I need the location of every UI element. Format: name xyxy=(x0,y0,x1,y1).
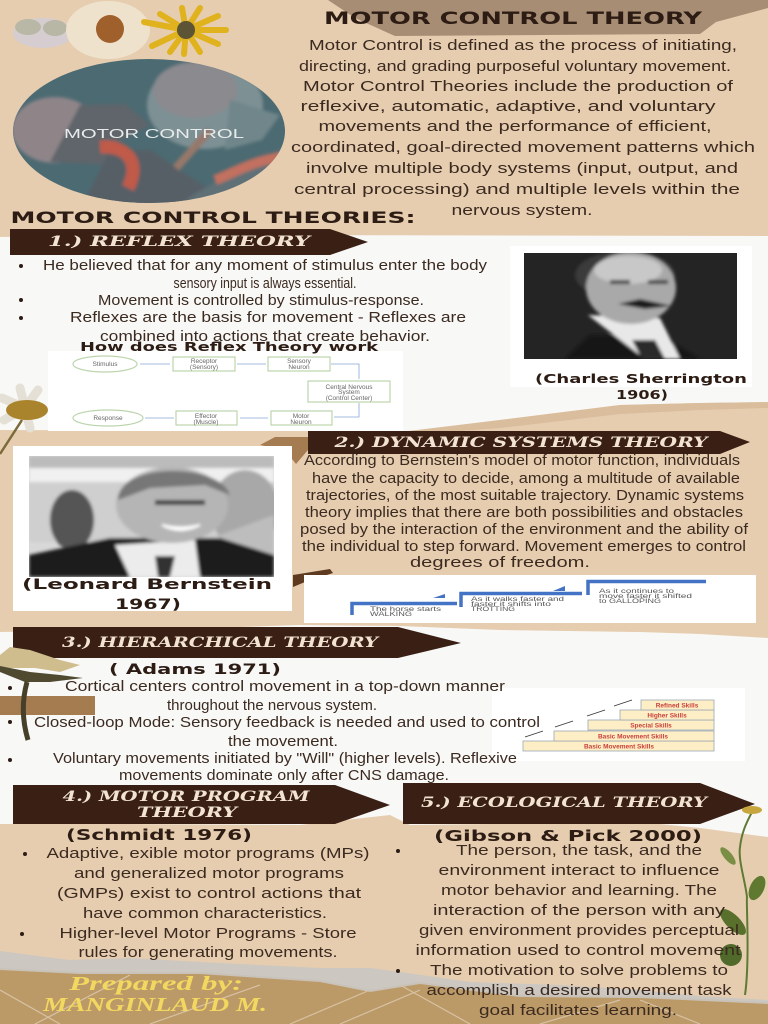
ecological theory text: motor behavior and learning. The xyxy=(441,882,717,899)
dynamic systems text: the individual to step forward. Movement emerges to control xyxy=(302,538,746,555)
stepped gait diagram: WALKING xyxy=(370,611,412,618)
photo card: Leonard Bernstein xyxy=(13,446,292,613)
banner: motor program theory: THEORY xyxy=(137,805,240,821)
prepared by credit: MANGINLAUD M. xyxy=(42,994,267,1016)
cardboard footer xyxy=(0,951,768,1024)
skills staircase diagram: Basic Movement Skills xyxy=(598,734,668,740)
banner: motor program theory: 4.) MOTOR PROGRAM xyxy=(62,789,310,805)
reflex theory bullets xyxy=(19,257,488,345)
reflex flow diagram: Stimulus xyxy=(93,361,118,368)
stepped gait diagram: As it walks faster and xyxy=(471,596,565,603)
motor program text: have common characteristics. xyxy=(83,905,327,922)
motor program text: Higher-level Motor Programs - Store xyxy=(60,925,356,942)
stepped gait diagram: move faster it shifted xyxy=(599,593,693,600)
torn white paper band upper xyxy=(0,235,768,432)
skills staircase diagram: Basic Movement Skills xyxy=(584,744,654,750)
torn tan paper strip xyxy=(400,402,768,434)
motor program text: rules for generating movements. xyxy=(78,944,338,961)
intro text block: central processing) and multiple levels within the xyxy=(294,181,740,198)
photo card: Leonard Bernstein: 1967) xyxy=(115,597,181,613)
dynamic systems text: theory implies that there are both possibilities and obstacles xyxy=(305,504,743,521)
banner: reflex theory: 1.) REFLEX THEORY xyxy=(48,234,313,250)
ecological theory text: given environment provides perceptual xyxy=(419,922,739,939)
intro text block: coordinated, goal-directed movement patterns which xyxy=(291,139,755,156)
photo card: Leonard Bernstein: (Leonard Bernstein xyxy=(22,577,272,593)
stepped gait diagram: The horse starts xyxy=(370,606,442,613)
reflex theory bullets: Reflexes are the basis for movement - Reflexes are xyxy=(70,309,466,326)
reflex flow diagram: System xyxy=(338,389,360,396)
hierarchical theory bullets: Voluntary movements initiated by "Will" (higher levels). Reflexive xyxy=(53,750,517,767)
reflex flow diagram: Motor xyxy=(293,413,310,420)
skills staircase diagram xyxy=(492,688,745,761)
ecological theory text: accomplish a desired movement task xyxy=(426,982,732,999)
intro text block: movements and the performance of efficient, xyxy=(318,118,712,135)
skills staircase diagram: Higher Skills xyxy=(647,712,687,720)
reflex flow diagram: Neuron xyxy=(288,364,310,371)
motor program text: Adaptive, exible motor programs (MPs) xyxy=(46,845,370,862)
hierarchical theory bullets xyxy=(8,678,540,784)
reflex flow diagram: Effector xyxy=(195,413,218,420)
banner: ecological theory: 5.) ECOLOGICAL THEORY xyxy=(421,795,710,811)
intro text block: Motor Control is defined as the process of initiating, xyxy=(309,37,737,54)
reflex theory bullets: combined into actions that create behavior. xyxy=(100,328,430,345)
dynamic systems text: degrees of freedom. xyxy=(410,554,590,571)
heading: motor control theories: MOTOR CONTROL THEORIES: xyxy=(10,208,416,227)
banner: hierarchical theory: 3.) HIERARCHICAL THEORY xyxy=(62,635,381,651)
stepped gait diagram: to GALLOPING xyxy=(599,598,661,605)
image: motor control oval xyxy=(12,59,285,210)
photo card: Charles Sherrington: (Charles Sherrington xyxy=(535,372,747,386)
icon: climbing plant xyxy=(716,806,768,995)
skills staircase diagram: Refined Skills xyxy=(656,702,699,710)
author: Gibson and Pick 2000: (Gibson & Pick 2000) xyxy=(434,827,702,845)
dynamic systems text: trajectories, of the most suitable trajectory. Dynamic systems xyxy=(306,487,744,504)
prepared by credit xyxy=(42,973,267,1016)
reflex flow diagram: (Sensory) xyxy=(190,364,218,371)
title: MOTOR CONTROL THEORY xyxy=(324,9,703,29)
intro text block: involve multiple body systems (input, output, and xyxy=(306,160,738,177)
banner: dynamic systems theory: 2.) DYNAMIC SYSTEMS THEORY xyxy=(333,435,710,451)
dynamic systems text: According to Bernstein's model of motor function, individuals xyxy=(304,452,740,469)
icon: pressed flowers xyxy=(13,1,226,59)
reflex theory bullets: sensory input is always essential. xyxy=(174,275,356,292)
dynamic systems text xyxy=(300,452,749,571)
author: Adams 1971: ( Adams 1971) xyxy=(109,662,281,678)
hierarchical theory bullets: Cortical centers control movement in a top-down manner xyxy=(65,678,505,695)
icon: daisy xyxy=(0,388,48,454)
motor program text xyxy=(20,845,370,961)
photo card: Charles Sherrington: 1906) xyxy=(616,388,668,402)
stepped gait diagram xyxy=(304,575,756,623)
subheading: how does reflex theory work: How does Reflex Theory work xyxy=(80,339,379,354)
reflex flow diagram: Receptor xyxy=(191,358,218,365)
reflex flow diagram xyxy=(48,351,403,431)
skills staircase diagram: Special Skills xyxy=(630,722,672,730)
hierarchical theory bullets: movements dominate only after CNS damage. xyxy=(119,767,449,784)
reflex theory bullets: He believed that for any moment of stimulus enter the body xyxy=(43,257,488,274)
ecological theory text: goal facilitates learning. xyxy=(479,1002,677,1019)
icon: rust ribbon xyxy=(293,569,333,587)
motor program text: and generalized motor programs xyxy=(74,865,344,882)
intro text block: reflexive, automatic, adaptive, and voluntary xyxy=(300,98,716,115)
ecological theory text: information used to control movement xyxy=(416,942,742,959)
torn brown paper behind title xyxy=(328,0,768,36)
ecological theory text: interaction of the person with any xyxy=(433,902,726,919)
dynamic systems text: posed by the interaction of the environment and the ability of xyxy=(300,521,749,538)
hierarchical theory bullets: Closed-loop Mode: Sensory feedback is needed and used to control xyxy=(34,714,540,731)
reflex flow diagram: (Muscle) xyxy=(194,419,218,426)
photo card: Charles Sherrington xyxy=(510,246,752,402)
banner: reflex theory xyxy=(10,229,368,255)
ecological theory text: The motivation to solve problems to xyxy=(430,962,728,979)
prepared by credit: Prepared by: xyxy=(67,973,243,995)
banner: hierarchical theory xyxy=(13,627,461,658)
torn white paper band lower xyxy=(0,625,768,837)
reflex flow diagram: Central Nervous xyxy=(326,384,373,391)
banner: motor program theory xyxy=(13,785,390,824)
author: Schmidt 1976: (Schmidt 1976) xyxy=(66,826,252,844)
intro text block: nervous system. xyxy=(452,202,592,219)
reflex theory bullets: Movement is controlled by stimulus-response. xyxy=(98,292,424,309)
reflex flow diagram: Neuron xyxy=(290,419,312,426)
icon: dried flower and tape xyxy=(0,647,95,740)
banner: dynamic systems theory xyxy=(308,431,750,454)
reflex flow diagram: Response xyxy=(93,415,123,422)
hierarchical theory bullets: the movement. xyxy=(228,733,338,750)
reflex flow diagram: (Control Center) xyxy=(326,395,372,402)
motor program text: (GMPs) exist to control actions that xyxy=(57,885,362,902)
dynamic systems text: have the capacity to decide, among a multitude of available xyxy=(312,470,740,487)
ecological theory text: environment interact to influence xyxy=(438,862,720,879)
hierarchical theory bullets: throughout the nervous system. xyxy=(167,697,377,714)
ecological theory text: The person, the task, and the xyxy=(456,842,702,859)
stepped gait diagram: faster it shifts into xyxy=(471,601,552,608)
image: motor control oval: MOTOR CONTROL xyxy=(64,126,244,141)
stepped gait diagram: TROTTING xyxy=(471,606,515,613)
banner: ecological theory xyxy=(403,783,755,824)
icon: brown leaf scrap xyxy=(260,437,308,464)
intro text block: Motor Control Theories include the production of xyxy=(303,78,734,95)
intro text block: directing, and grading purposeful voluntary movement. xyxy=(299,58,731,75)
ecological theory text xyxy=(396,842,742,1019)
reflex flow diagram: Sensory xyxy=(287,358,312,365)
stepped gait diagram: As it continues to xyxy=(599,588,675,595)
intro text block xyxy=(291,37,755,219)
